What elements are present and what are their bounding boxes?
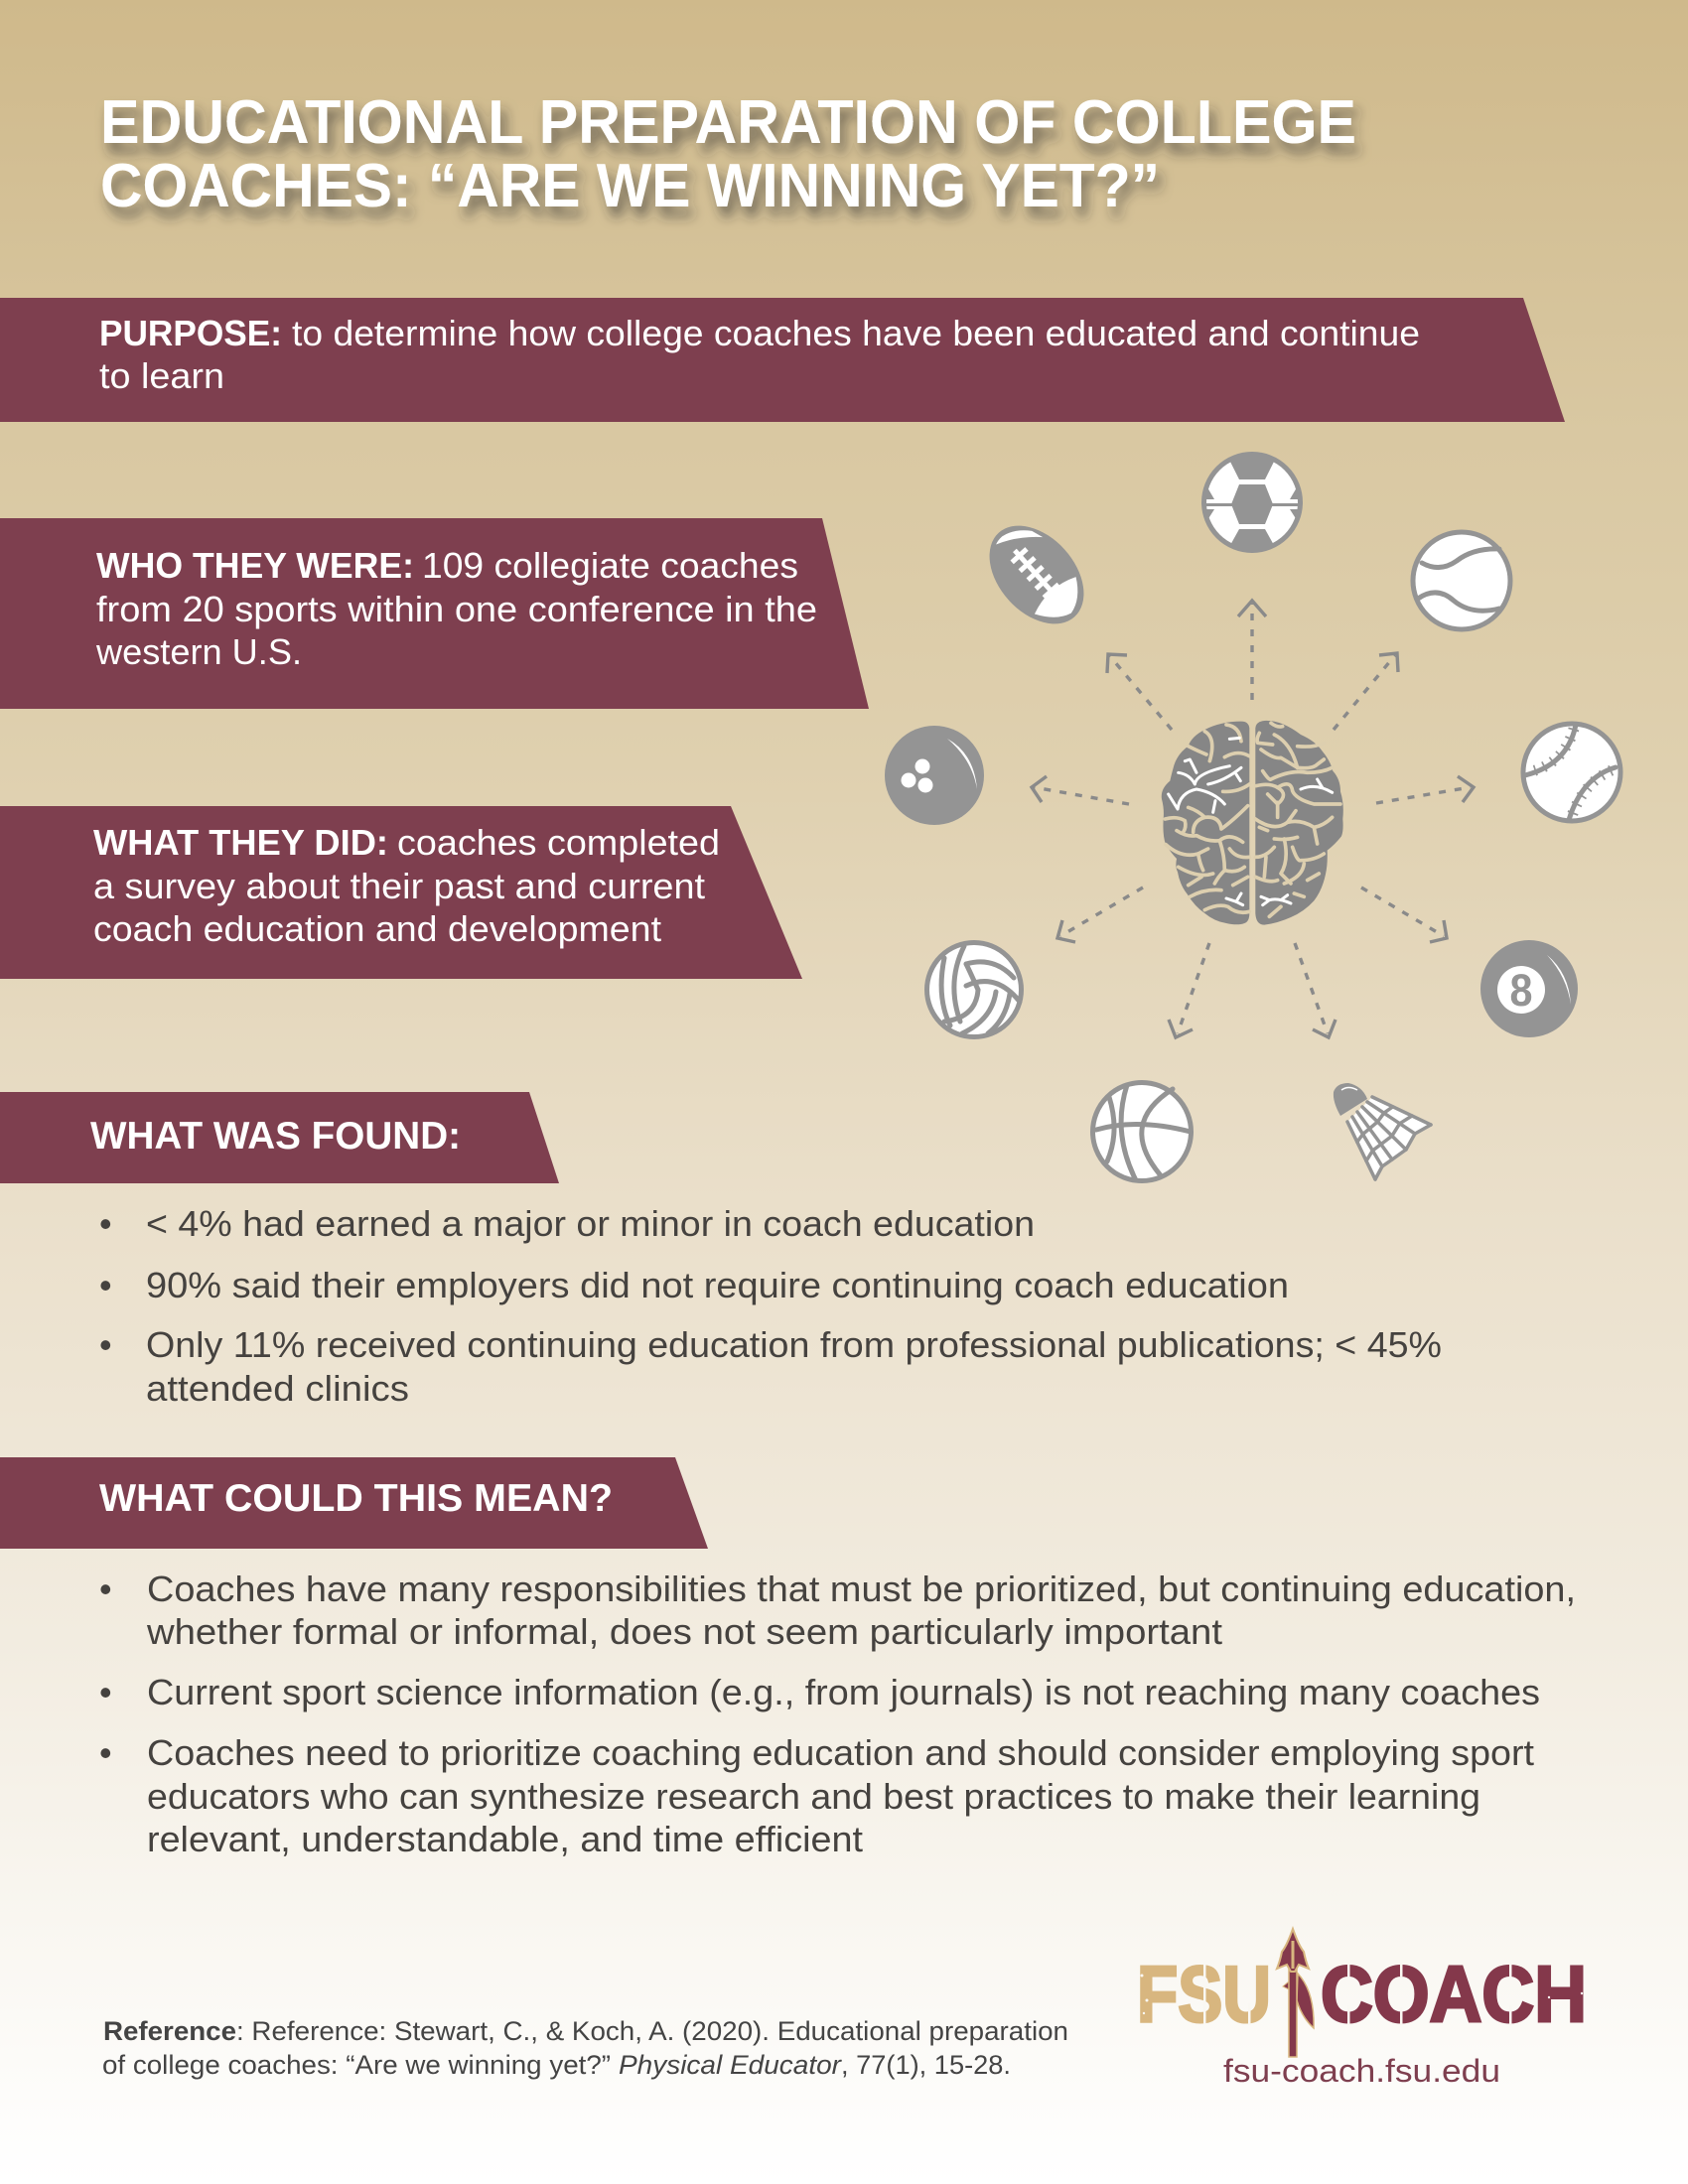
panel: who they were [0,518,869,709]
reference: Physical Educator [619,2050,842,2080]
arrow: to bowling ball [1032,776,1129,804]
icon: soccer ball [1203,452,1301,553]
panel: who they were: western U.S. [95,631,302,672]
panel: what could this mean heading: WHAT COULD THIS MEAN? [99,1477,613,1520]
implication: sport educators: • [99,1732,112,1773]
finding: coach education major: • [99,1203,112,1244]
implication: sport educators [99,1732,1534,1859]
arrow: to basketball [1169,943,1209,1037]
panel: what they did: WHAT THEY DID: [93,822,388,863]
reference: , 77(1), 15-28. [841,2050,1011,2080]
title: EDUCATIONAL PREPARATION OF COLLEGE [100,88,1356,157]
icon: eight ball: 8 [1509,965,1533,1016]
panel: what was found heading [0,1092,559,1183]
panel: purpose: to determine how college coaches have been educated and continue [292,313,1420,353]
arrow: to volleyball [1057,887,1143,942]
title: COACHES: “ARE WE WINNING YET?” [100,152,1160,220]
list: what could this mean [99,1569,1576,1859]
implication: sport science: • [99,1672,112,1712]
panel: purpose: to learn [99,355,224,396]
logo: FSU Coach [1137,1929,1587,2057]
arrow: to soccer ball [1238,601,1266,700]
website url: fsu-coach.fsu.edu [1223,2053,1500,2089]
logo text: FSU: FSU [1137,1950,1271,2038]
panel: who they were: from 20 sports within one conference in the [96,589,817,629]
panel: what they did: a survey about their past and current [93,866,705,906]
finding: publications and clinics: attended clinics [146,1368,409,1409]
implication: responsibilities: • [99,1569,112,1609]
reference: : Reference: Stewart, C., & Koch, A. (2020). Educational preparation [236,2016,1068,2046]
finding: publications and clinics [99,1324,1442,1409]
icon: bowling ball [885,726,984,825]
panel: what they did: coaches completed [397,822,720,863]
logo text: COACH: COACH [1321,1950,1587,2038]
panel: purpose: PURPOSE: [99,313,282,353]
diagram: brain radiating to sports [885,452,1620,1181]
reference: Reference [103,2016,236,2046]
finding: publications and clinics: • [99,1324,112,1365]
panel: purpose [0,298,1565,422]
arrow: to tennis ball [1334,653,1398,730]
icon: eight ball [1480,940,1578,1037]
arrow: to eight ball [1361,887,1447,942]
implication: responsibilities: whether formal or informal, does not seem particularly important [146,1611,1222,1652]
implication: responsibilities [99,1569,1576,1652]
icon: tennis ball [1413,532,1510,629]
panel: who they were: 109 collegiate coaches [422,545,798,586]
panel: what they did: coach education and development [93,908,661,949]
icon: brain [1162,721,1343,925]
implication: sport educators: relevant, understandable, and time efficient [147,1819,863,1859]
icon: shuttlecock [1334,1083,1431,1179]
panel: what was found heading: WHAT WAS FOUND: [90,1115,461,1158]
finding: coach education major: < 4% had earned a major or minor in coach education [146,1203,1035,1244]
icon: baseball [1523,724,1620,821]
implication: sport science: Current sport science information (e.g., from journals) is not reaching many coaches [147,1672,1540,1712]
list: what was found [99,1203,1442,1409]
finding: publications and clinics: Only 11% received continuing education from professional publications; < 45% [146,1324,1442,1365]
finding: employers: • [99,1265,112,1305]
panel: who they were: WHO THEY WERE: [96,545,414,586]
icon: basketball [1092,1082,1192,1181]
arrow: to football [1107,654,1172,730]
implication: sport educators: Coaches need to prioritize coaching education and should consider employing sport [147,1732,1534,1773]
arrow: to shuttlecock [1295,943,1336,1037]
panel: what they did [0,806,802,979]
implication: responsibilities: Coaches have many responsibilities that must be prioritized, but continuing education, [147,1569,1576,1609]
icon: volleyball [927,943,1021,1036]
icon: spear [1277,1929,1314,2057]
arrow: to baseball [1376,776,1474,803]
panel: what could this mean heading [0,1457,708,1549]
title [100,88,1356,220]
icon: football [971,507,1102,642]
finding: employers: 90% said their employers did not require continuing coach education [146,1265,1289,1305]
reference [102,2016,1068,2080]
reference: of college coaches: “Are we winning yet?” [102,2050,611,2080]
implication: sport educators: educators who can synthesize research and best practices to make their learning [147,1776,1480,1817]
